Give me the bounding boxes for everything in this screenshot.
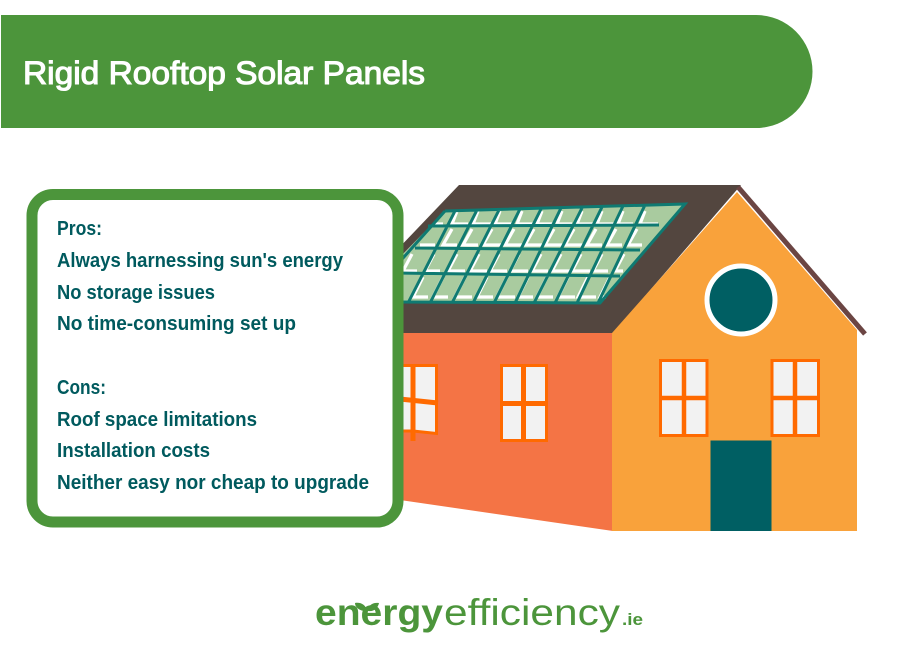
- pros list: Always harnessing sun's energy: [57, 250, 344, 272]
- logo wordmark: efficiency: [444, 592, 621, 633]
- front window right: [771, 360, 819, 436]
- logo leaf icon: [355, 603, 379, 611]
- logo wordmark: energy: [315, 592, 443, 633]
- cons list: [57, 377, 369, 494]
- logo: [315, 592, 643, 633]
- side window left: [395, 364, 438, 441]
- front gable wall: [612, 192, 857, 531]
- pros list: [57, 218, 344, 335]
- cons list: Roof space limitations: [57, 409, 257, 431]
- roof edge fascia: [738, 187, 865, 334]
- side window middle: [500, 364, 548, 442]
- pros list: No time-consuming set up: [57, 313, 296, 335]
- front door: [710, 440, 772, 531]
- roof: [395, 185, 741, 333]
- house illustration: [395, 185, 865, 531]
- title: Rigid Rooftop Solar Panels: [23, 55, 425, 91]
- panel grid lines: [395, 204, 685, 303]
- logo wordmark: .ie: [622, 610, 643, 629]
- cons list: Cons:: [57, 377, 106, 399]
- pros list: Pros:: [57, 218, 102, 240]
- front window left: [660, 360, 707, 436]
- panel white highlights: [403, 211, 658, 297]
- cons list: Neither easy nor cheap to upgrade: [57, 472, 369, 494]
- pros list: No storage issues: [57, 282, 215, 304]
- pros and cons panel: [32, 194, 398, 522]
- cons list: Installation costs: [57, 440, 210, 462]
- side wall: [400, 333, 613, 531]
- round attic window: [707, 266, 775, 334]
- header banner: [1, 15, 812, 128]
- solar panel array: [395, 204, 685, 303]
